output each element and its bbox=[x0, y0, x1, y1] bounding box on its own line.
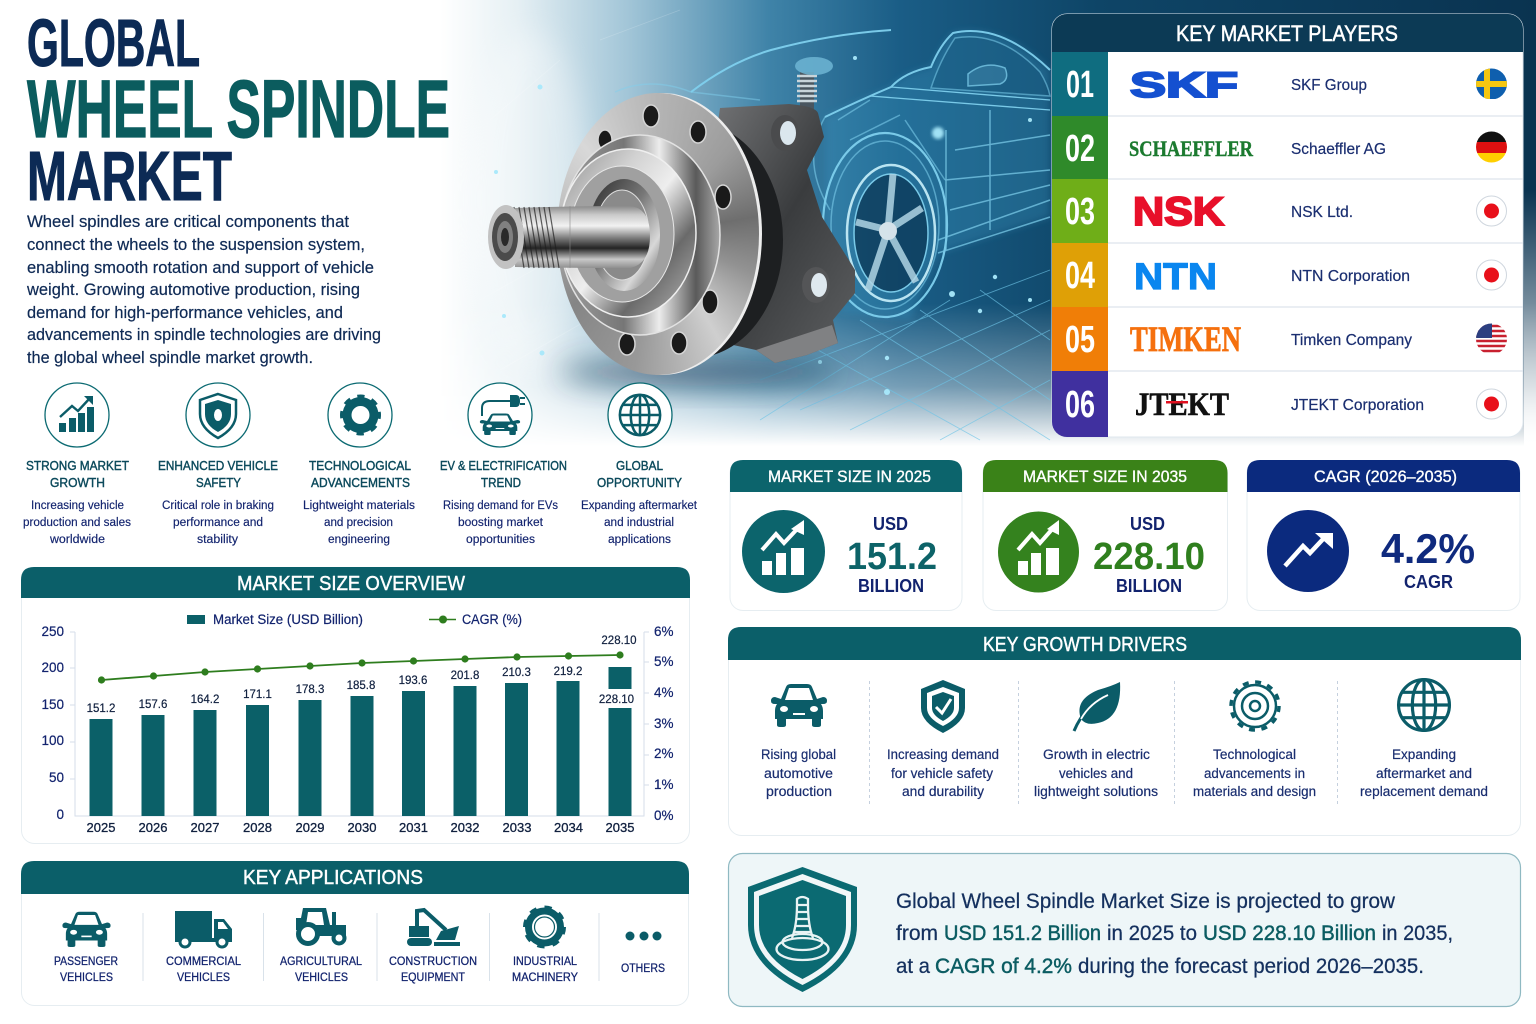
driver: globe: aftermarket and bbox=[1376, 766, 1472, 781]
description: Rising demand for EVs bbox=[443, 500, 558, 512]
number column: 05 bbox=[1065, 319, 1095, 361]
application: agricultural vehicles: AGRICULTURAL bbox=[280, 956, 363, 968]
bar chart: 164.2 bbox=[191, 694, 219, 706]
player 2: Schaeffler bbox=[1129, 131, 1507, 164]
player 6: JTEKT: JTEKT bbox=[1135, 387, 1229, 423]
icon: gear bbox=[328, 383, 392, 447]
description: engineering bbox=[328, 534, 390, 546]
player 1: SKF: SKF Group bbox=[1291, 77, 1367, 94]
intro paragraph: weight. Growing automotive production, rising bbox=[26, 281, 360, 299]
bar chart: 50 bbox=[49, 770, 64, 785]
summary text: USD 228.10 Billion bbox=[1203, 922, 1376, 945]
feature: enhanced vehicle safety bbox=[158, 383, 278, 546]
heading: TECHNOLOGICAL bbox=[309, 459, 411, 473]
icon: electric car with plug bbox=[468, 383, 532, 447]
intro paragraph: Wheel spindles are critical components that bbox=[27, 213, 349, 231]
heading: KEY APPLICATIONS bbox=[243, 867, 423, 889]
bar chart: 178.3 bbox=[296, 684, 324, 696]
bar chart: 250 bbox=[41, 624, 64, 639]
bar chart: 2% bbox=[654, 746, 674, 761]
card header bbox=[983, 460, 1228, 492]
bar chart: 2025 bbox=[87, 820, 115, 835]
bar chart: 193.6 bbox=[399, 675, 427, 687]
bar chart bbox=[41, 624, 674, 835]
application: construction equipment: EQUIPMENT bbox=[401, 972, 465, 984]
heading: ENHANCED VEHICLE bbox=[158, 459, 278, 473]
bar chart: 2026 bbox=[139, 820, 167, 835]
driver: rising production: automotive bbox=[764, 766, 833, 781]
bar chart: 100 bbox=[41, 733, 64, 748]
bar chart: 1% bbox=[654, 777, 674, 792]
bar chart: 151.2 bbox=[87, 703, 115, 715]
driver: globe: Expanding bbox=[1392, 747, 1456, 762]
heading: KEY GROWTH DRIVERS bbox=[983, 634, 1187, 656]
title bbox=[27, 6, 450, 215]
header bar bbox=[728, 627, 1521, 660]
shaft nose bbox=[488, 205, 524, 269]
description: Expanding aftermarket bbox=[581, 500, 698, 512]
rear drum bbox=[603, 122, 783, 358]
heading bbox=[309, 459, 411, 490]
player 5: Timken bbox=[1130, 324, 1507, 352]
driver: vehicle safety: and durability bbox=[902, 784, 984, 799]
summary text: from bbox=[896, 922, 938, 945]
application: others: OTHERS bbox=[621, 963, 665, 975]
heading bbox=[440, 459, 567, 490]
card: CAGR: CAGR (2026–2035) bbox=[1314, 468, 1457, 486]
bar chart: 0 bbox=[56, 807, 64, 822]
number column: 01 bbox=[1066, 64, 1094, 106]
description bbox=[162, 500, 274, 546]
number column bbox=[1052, 52, 1108, 437]
value bbox=[847, 514, 937, 596]
thread bbox=[514, 207, 559, 268]
summary text: in 2025 to bbox=[1107, 922, 1197, 945]
description: production and sales bbox=[23, 517, 131, 529]
bar chart: 2030 bbox=[348, 820, 376, 835]
bar chart: 3% bbox=[654, 716, 674, 731]
driver: EV leaf bbox=[1034, 682, 1158, 799]
bar chart: 157.6 bbox=[139, 699, 167, 711]
driver: vehicle safety: for vehicle safety bbox=[891, 766, 993, 781]
number column: 03 bbox=[1065, 191, 1095, 233]
driver: technology gear: materials and design bbox=[1193, 784, 1316, 799]
summary text: in 2035, bbox=[1382, 922, 1453, 945]
description: boosting market bbox=[458, 517, 544, 529]
bar chart: 2035 bbox=[606, 820, 634, 835]
wireframe car illustration bbox=[480, 10, 1050, 440]
value: 228.10 bbox=[1093, 536, 1205, 578]
title: GLOBAL bbox=[27, 6, 200, 81]
application: passenger vehicles: VEHICLES bbox=[60, 972, 113, 984]
heading bbox=[597, 459, 683, 490]
driver: technology gear: advancements in bbox=[1204, 766, 1305, 781]
threaded stud bbox=[795, 57, 833, 110]
driver: rising production bbox=[761, 684, 836, 799]
legend: Market Size (USD Billion) bbox=[213, 612, 363, 627]
description: Critical role in braking bbox=[162, 500, 274, 512]
header bar bbox=[21, 861, 689, 894]
player 3: NSK: NSK Ltd. bbox=[1291, 204, 1353, 221]
value: USD bbox=[873, 514, 908, 534]
wheel spindle hub product image bbox=[488, 57, 855, 386]
icon: growth bars bbox=[45, 383, 109, 447]
card header bbox=[730, 460, 962, 492]
bar chart: 228.10 bbox=[599, 694, 634, 706]
bar chart: 210.3 bbox=[502, 667, 531, 679]
player 5: Timken: TIMKEN bbox=[1130, 319, 1241, 359]
bar chart: 2029 bbox=[296, 820, 324, 835]
icon: trend arrow bbox=[1267, 510, 1349, 592]
description bbox=[23, 500, 131, 546]
application: commercial vehicles: COMMERCIAL bbox=[166, 956, 242, 968]
summary text: at a bbox=[896, 955, 930, 978]
intro paragraph: the global wheel spindle market growth. bbox=[27, 349, 313, 367]
bar chart: 2027 bbox=[191, 820, 219, 835]
heading: TREND bbox=[481, 476, 521, 490]
summary text: during the forecast period 2026–2035. bbox=[1078, 955, 1424, 978]
shaft bbox=[515, 206, 650, 268]
bar chart: 201.8 bbox=[451, 670, 479, 682]
application: commercial vehicles bbox=[166, 911, 242, 984]
legend bbox=[187, 612, 522, 627]
bar chart: 5% bbox=[654, 654, 674, 669]
icon: growth chart bbox=[742, 510, 825, 593]
number column: 06 bbox=[1065, 384, 1095, 426]
player 3: NSK bbox=[1133, 190, 1506, 234]
bar chart: 171.1 bbox=[243, 689, 272, 701]
bar chart: 6% bbox=[654, 624, 674, 639]
application: industrial machinery: MACHINERY bbox=[512, 972, 578, 984]
value: 4.2% bbox=[1381, 525, 1475, 572]
summary text: CAGR of 4.2% bbox=[935, 955, 1072, 978]
player 2: Schaeffler: Schaeffler AG bbox=[1291, 141, 1386, 158]
application: industrial machinery bbox=[512, 908, 578, 984]
heading: EV & ELECTRIFICATION bbox=[440, 459, 567, 473]
description: and precision bbox=[324, 517, 393, 529]
description: Increasing vehicle bbox=[31, 500, 124, 512]
driver: vehicle safety: Increasing demand bbox=[887, 747, 999, 762]
bar chart: 185.8 bbox=[347, 680, 375, 692]
player 5: Timken: Timken Company bbox=[1291, 332, 1412, 349]
application: passenger vehicles: PASSENGER bbox=[54, 956, 118, 968]
card: market size in 2035: MARKET SIZE IN 2035 bbox=[1023, 468, 1187, 486]
bolt holes bbox=[598, 105, 731, 355]
application: construction equipment bbox=[389, 910, 477, 984]
driver: globe bbox=[1360, 680, 1488, 799]
flange rim bbox=[562, 93, 762, 375]
feature: global opportunity bbox=[581, 383, 698, 546]
description: and industrial bbox=[604, 517, 674, 529]
description bbox=[443, 500, 558, 546]
driver: vehicle safety bbox=[887, 680, 999, 799]
driver: technology gear bbox=[1193, 682, 1316, 799]
bar chart: 0% bbox=[654, 808, 674, 823]
panel: key applications bbox=[21, 861, 689, 1006]
value: USD bbox=[1130, 514, 1165, 534]
icon: shield bbox=[186, 383, 250, 447]
bar chart: 150 bbox=[41, 697, 64, 712]
driver: EV leaf: vehicles and bbox=[1059, 766, 1133, 781]
card: market size in 2025: MARKET SIZE IN 2025 bbox=[768, 468, 931, 486]
heading: OPPORTUNITY bbox=[597, 476, 683, 490]
hero background bbox=[440, 0, 1536, 460]
bar chart: 2032 bbox=[451, 820, 479, 835]
heading bbox=[158, 459, 278, 490]
heading: GLOBAL bbox=[616, 459, 663, 473]
legend: CAGR (%) bbox=[462, 612, 522, 627]
bar chart: 2033 bbox=[503, 820, 531, 835]
value: 151.2 bbox=[847, 536, 937, 578]
feature: strong market growth bbox=[23, 383, 131, 546]
value: BILLION bbox=[1116, 576, 1182, 596]
description bbox=[303, 500, 415, 546]
panel: key growth drivers bbox=[728, 627, 1521, 836]
bar chart: 2031 bbox=[399, 820, 428, 835]
player 1: SKF: SKF bbox=[1130, 66, 1238, 105]
player 4: NTN: NTN bbox=[1134, 256, 1217, 297]
callout: market projection summary bbox=[728, 854, 1520, 1006]
flange face bbox=[557, 93, 759, 375]
application: industrial machinery: INDUSTRIAL bbox=[513, 956, 578, 968]
heading: SAFETY bbox=[196, 476, 242, 490]
heading: MARKET SIZE OVERVIEW bbox=[237, 573, 465, 595]
description: Lightweight materials bbox=[303, 500, 415, 512]
value: CAGR bbox=[1404, 572, 1453, 592]
header bar bbox=[1052, 14, 1523, 52]
summary text: USD 151.2 Billion bbox=[944, 922, 1101, 945]
bar chart: 2034 bbox=[554, 820, 583, 835]
application: commercial vehicles: VEHICLES bbox=[177, 972, 230, 984]
value: BILLION bbox=[858, 576, 924, 596]
driver: EV leaf: Growth in electric bbox=[1043, 747, 1150, 762]
description: performance and bbox=[173, 517, 263, 529]
intro paragraph: advancements in spindle technologies are driving bbox=[27, 326, 381, 344]
panel: market size overview bbox=[21, 567, 690, 844]
player 1: SKF bbox=[1130, 68, 1507, 99]
driver: technology gear: Technological bbox=[1213, 747, 1296, 762]
number column: 04 bbox=[1065, 255, 1095, 297]
card header bbox=[1247, 460, 1520, 492]
value bbox=[1381, 525, 1475, 592]
summary text bbox=[896, 890, 1453, 978]
icon: spindle shield bbox=[748, 867, 857, 992]
intro paragraph bbox=[26, 213, 381, 367]
application: passenger vehicles bbox=[54, 912, 118, 984]
heading: GROWTH bbox=[50, 476, 105, 490]
intro paragraph: connect the wheels to the suspension system, bbox=[27, 236, 365, 254]
icon: globe bbox=[608, 383, 672, 447]
panel: key market players bbox=[1052, 14, 1523, 437]
intro paragraph: enabling smooth rotation and support of vehicle bbox=[27, 259, 374, 277]
card: CAGR bbox=[1247, 460, 1520, 610]
heading: KEY MARKET PLAYERS bbox=[1176, 21, 1398, 46]
driver: rising production: production bbox=[766, 784, 832, 799]
application: others bbox=[621, 932, 665, 975]
player 4: NTN bbox=[1134, 256, 1506, 297]
player 4: NTN: NTN Corporation bbox=[1291, 268, 1410, 285]
bar chart: 200 bbox=[41, 660, 64, 675]
player 6: JTEKT bbox=[1135, 387, 1506, 423]
hub shadow bbox=[560, 358, 840, 386]
application: construction equipment: CONSTRUCTION bbox=[389, 956, 477, 968]
cast knuckle bbox=[700, 104, 855, 363]
intro paragraph: demand for high-performance vehicles, and bbox=[27, 304, 343, 322]
bar chart: 219.2 bbox=[554, 666, 582, 678]
feature: technological advancements bbox=[303, 383, 415, 546]
bar chart: 228.10 bbox=[601, 635, 637, 647]
machined rings bbox=[560, 135, 720, 335]
summary text: Global Wheel Spindle Market Size is projected to grow bbox=[896, 890, 1396, 913]
heading: STRONG MARKET bbox=[26, 459, 129, 473]
description bbox=[581, 500, 698, 546]
heading bbox=[26, 459, 129, 490]
icon: growth chart bbox=[998, 512, 1079, 592]
feature: EV and electrification trend bbox=[440, 383, 567, 546]
description: stability bbox=[197, 534, 238, 546]
bar chart: 4% bbox=[654, 685, 674, 700]
title: MARKET bbox=[27, 137, 232, 215]
driver: rising production: Rising global bbox=[761, 747, 836, 762]
description: applications bbox=[608, 534, 671, 546]
description: opportunities bbox=[466, 534, 535, 546]
player 2: Schaeffler: SCHAEFFLER bbox=[1129, 136, 1254, 161]
description: worldwide bbox=[49, 534, 105, 546]
title: WHEEL SPINDLE bbox=[27, 64, 450, 155]
number column: 02 bbox=[1065, 128, 1095, 170]
application: agricultural vehicles: VEHICLES bbox=[295, 972, 348, 984]
driver: globe: replacement demand bbox=[1360, 784, 1488, 799]
card: market size in 2035 bbox=[983, 460, 1228, 610]
driver: EV leaf: lightweight solutions bbox=[1034, 784, 1158, 799]
CAGR line bbox=[98, 651, 624, 684]
application: agricultural vehicles bbox=[280, 908, 363, 984]
player 3: NSK: NSK bbox=[1133, 190, 1224, 234]
value bbox=[1093, 514, 1205, 596]
player 6: JTEKT: JTEKT Corporation bbox=[1291, 397, 1424, 414]
card: market size in 2025 bbox=[730, 460, 962, 610]
bar chart: 2028 bbox=[243, 820, 272, 835]
header bar bbox=[21, 567, 690, 598]
heading: ADVANCEMENTS bbox=[311, 476, 410, 490]
